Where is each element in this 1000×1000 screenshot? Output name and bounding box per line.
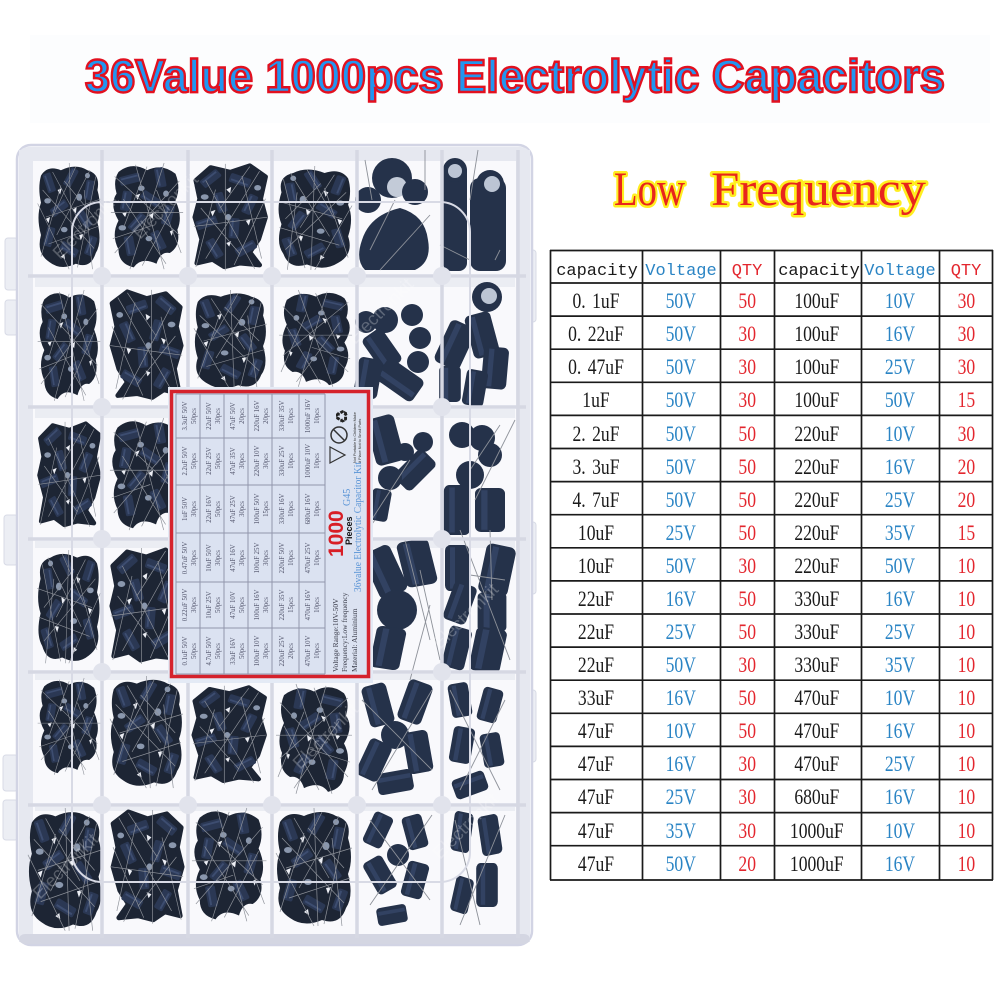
label value cells: 100uF 50V xyxy=(254,494,261,524)
row 18: 50V xyxy=(666,852,696,877)
row 13: 10 xyxy=(958,686,975,711)
label value cells: 47uF 35V xyxy=(230,447,237,475)
row 8: 15 xyxy=(958,521,975,546)
label value cells: 50pcs xyxy=(191,643,198,659)
row 13: 16V xyxy=(666,686,696,711)
label value cells: 33uF 16V xyxy=(230,637,237,665)
label value cells: 470uF 25V xyxy=(305,543,312,573)
divider junction nodes xyxy=(93,267,451,814)
label value cells: 30pcs xyxy=(215,550,222,566)
row 2 xyxy=(568,322,975,347)
row 15: 30 xyxy=(738,752,756,777)
label spec text: Material: Aluminium xyxy=(350,608,359,672)
organizer box panel xyxy=(3,145,536,945)
label value cells: 47uF 16V xyxy=(230,544,237,572)
row 12: 10 xyxy=(958,653,975,678)
row 6: 50V xyxy=(666,455,696,480)
subtitle: Low Frequency xyxy=(614,163,926,216)
row 8: 50 xyxy=(738,521,756,546)
row 13 xyxy=(578,686,975,711)
row 9 xyxy=(578,554,975,579)
row 3: 0. 47uF xyxy=(568,355,624,380)
label value cells: 47uF 25V xyxy=(230,495,237,523)
row 6: 220uF xyxy=(794,455,839,480)
row 1: 30 xyxy=(958,289,975,314)
label value cells: 50pcs xyxy=(239,643,246,659)
label spec text: Voltage Range:10V-50V xyxy=(331,598,340,672)
label value cells: 100uF 10V xyxy=(254,636,261,666)
label value cells: 30pcs xyxy=(191,501,198,517)
compartment dividers xyxy=(28,150,526,938)
label value cells: 0.47uF 50V xyxy=(182,542,189,574)
label value cells: 30pcs xyxy=(239,453,246,469)
row 4 xyxy=(582,388,975,413)
label value cells: 50pcs xyxy=(215,501,222,517)
row 7 xyxy=(573,488,975,513)
row 1: 0. 1uF xyxy=(573,289,619,314)
capacitors in small-value compartments xyxy=(28,163,352,931)
row 2: 100uF xyxy=(794,322,839,347)
row 6: 50 xyxy=(738,455,756,480)
icon: recycle: ♻ xyxy=(333,409,353,424)
row 11 xyxy=(578,620,975,645)
label value cells xyxy=(182,399,321,666)
row 7: 220uF xyxy=(794,488,839,513)
label value cells: 0.1uF 50V xyxy=(182,636,189,666)
label value cells: 10pcs xyxy=(288,501,295,517)
label warning small print: It Place Not to Small Parts xyxy=(358,419,362,463)
label value cells: 47uF 10V xyxy=(230,591,237,619)
row 16: 47uF xyxy=(578,785,614,810)
row 15: 25V xyxy=(885,752,916,777)
row 14: 16V xyxy=(885,719,916,744)
row 16: 16V xyxy=(885,785,916,810)
row 16: 25V xyxy=(666,785,696,810)
row 7: 4. 7uF xyxy=(573,488,619,513)
label value cells: 30pcs xyxy=(191,597,198,613)
row 1: 50V xyxy=(666,289,696,314)
row 7: 20 xyxy=(958,488,975,513)
row 8: 25V xyxy=(666,521,696,546)
row 8: 220uF xyxy=(794,521,839,546)
row 3: 100uF xyxy=(794,355,839,380)
label kit name: G45 xyxy=(342,489,353,506)
label 1000 pieces badge: Pieces xyxy=(344,516,354,545)
row 14: 10 xyxy=(958,719,975,744)
label value cells: 3.3uF 50V xyxy=(182,401,189,431)
label value cells: 50pcs xyxy=(191,453,198,469)
left and right latches xyxy=(3,238,536,840)
row 9: 10 xyxy=(958,554,975,579)
watermark text: Electronkit xyxy=(289,699,362,773)
subtitle: Low Frequency: Low xyxy=(614,163,685,216)
row 18: 10 xyxy=(958,852,975,877)
row 6: 20 xyxy=(958,455,975,480)
specification table xyxy=(550,250,993,880)
row 13: 50 xyxy=(738,686,756,711)
icon: warning triangle xyxy=(330,447,345,463)
watermark text: Electronkit xyxy=(129,169,202,243)
row 2: 0. 22uF xyxy=(568,322,624,347)
row 11: 330uF xyxy=(794,620,839,645)
data rows xyxy=(568,289,975,877)
row 17: 30 xyxy=(738,819,756,844)
row 18: 1000uF xyxy=(790,852,844,877)
title: 36Value 1000pcs Electrolytic Capacitors xyxy=(85,50,945,102)
row 2: 30 xyxy=(958,322,975,347)
row 12: 35V xyxy=(885,653,916,678)
label value cells: 15pcs xyxy=(263,501,270,517)
row 4: 30 xyxy=(738,388,756,413)
row 11: 25V xyxy=(885,620,916,645)
row 9: 220uF xyxy=(794,554,839,579)
row 5: 2. 2uF xyxy=(573,422,619,447)
row 17: 1000uF xyxy=(790,819,844,844)
label value cells: 50pcs xyxy=(215,643,222,659)
label value cells: 4.7uF 50V xyxy=(206,636,213,666)
product label card xyxy=(168,387,373,683)
label value cells: 470uF 10V xyxy=(305,636,312,666)
header row: Voltage xyxy=(864,262,936,281)
row 4: 50V xyxy=(885,388,916,413)
row 11: 10 xyxy=(958,620,975,645)
row 12: 30 xyxy=(738,653,756,678)
row 17: 35V xyxy=(666,819,696,844)
row 12: 50V xyxy=(666,653,696,678)
header row: capacity xyxy=(778,262,860,281)
row 5: 30 xyxy=(958,422,975,447)
label warning small print xyxy=(353,412,362,463)
row 7: 50 xyxy=(738,488,756,513)
label value cells: 30pcs xyxy=(239,501,246,517)
label value cells: 220uF 50V xyxy=(279,543,286,573)
label value cells: 220uF 16V xyxy=(254,401,261,431)
row 4: 15 xyxy=(958,388,975,413)
capacitors in large-value compartments xyxy=(353,158,517,926)
plastic tray xyxy=(17,145,532,945)
label value cells: 100uF 25V xyxy=(254,543,261,573)
row 11: 22uF xyxy=(578,620,614,645)
label value cells: 330uF 25V xyxy=(279,446,286,476)
label value cells: 220uF 35V xyxy=(279,590,286,620)
label value cells: 10pcs xyxy=(288,453,295,469)
label value cells: 10pcs xyxy=(314,597,321,613)
row 14 xyxy=(578,719,975,744)
header row: Voltage xyxy=(645,262,717,281)
header row: QTY xyxy=(732,262,762,281)
label value cells: 20pcs xyxy=(239,408,246,424)
label value cells: 100uF 16V xyxy=(254,590,261,620)
row 14: 10V xyxy=(666,719,696,744)
row 14: 50 xyxy=(738,719,756,744)
row 6 xyxy=(573,455,975,480)
label spec text xyxy=(331,592,359,672)
label value cells: 10pcs xyxy=(314,453,321,469)
label value cells: 30pcs xyxy=(263,453,270,469)
row 12 xyxy=(578,653,975,678)
row 1: 100uF xyxy=(794,289,839,314)
label value cells: 50pcs xyxy=(215,453,222,469)
row 9: 10uF xyxy=(578,554,614,579)
row 13: 470uF xyxy=(794,686,839,711)
label value cells: 10pcs xyxy=(314,550,321,566)
row 5: 220uF xyxy=(794,422,839,447)
row 15: 16V xyxy=(666,752,696,777)
row 10: 50 xyxy=(738,587,756,612)
row 3: 25V xyxy=(885,355,916,380)
row 7: 50V xyxy=(666,488,696,513)
row 5: 50V xyxy=(666,422,696,447)
label value cells: 330uF 35V xyxy=(279,401,286,431)
label kit name: 36value Electrolytic Capacitor Kit xyxy=(353,462,364,592)
label value cells: 50pcs xyxy=(239,597,246,613)
label value cells: 30pcs xyxy=(239,550,246,566)
row 18: 16V xyxy=(885,852,916,877)
header row xyxy=(556,262,981,281)
row 10: 16V xyxy=(885,587,916,612)
tray bottom edge shading xyxy=(19,934,530,944)
row 3: 30 xyxy=(958,355,975,380)
label value cells: 220uF 25V xyxy=(279,636,286,666)
row 15: 10 xyxy=(958,752,975,777)
label value cells: 680uF 16V xyxy=(305,494,312,524)
label spec text: Frequency:Low frequency xyxy=(340,592,349,672)
watermark text: Electronkit xyxy=(29,829,102,903)
row 18: 20 xyxy=(738,852,756,877)
label value cells: 10pcs xyxy=(314,408,321,424)
label value cells: 10pcs xyxy=(288,550,295,566)
row 11: 25V xyxy=(666,620,696,645)
label value cells: 470uF 16V xyxy=(305,590,312,620)
row 8: 35V xyxy=(885,521,916,546)
row 14: 47uF xyxy=(578,719,614,744)
label value cells: 30pcs xyxy=(215,408,222,424)
watermark text: Electronkit xyxy=(429,579,502,653)
header row: QTY xyxy=(951,262,981,281)
row 13: 33uF xyxy=(578,686,614,711)
label value cells: 330uF 16V xyxy=(279,494,286,524)
watermark text: Electronkit xyxy=(429,789,502,863)
row 5: 10V xyxy=(885,422,916,447)
label value cells: 22uF 16V xyxy=(206,495,213,523)
row 6: 3. 3uF xyxy=(573,455,619,480)
label background and red border xyxy=(168,387,373,683)
row 3: 50V xyxy=(666,355,696,380)
label value cells: 2.2uF 50V xyxy=(182,446,189,476)
label value cells: 30pcs xyxy=(191,550,198,566)
row 13: 10V xyxy=(885,686,916,711)
row 10: 16V xyxy=(666,587,696,612)
label grid xyxy=(176,394,325,674)
row 9: 30 xyxy=(738,554,756,579)
row 17 xyxy=(578,819,975,844)
label value cells: 10pcs xyxy=(314,643,321,659)
row 18: 47uF xyxy=(578,852,614,877)
tray inner shading xyxy=(19,147,530,942)
row 3 xyxy=(568,355,975,380)
label value cells: 30pcs xyxy=(263,597,270,613)
label warning small print: Not Portable to Children Make xyxy=(353,412,357,463)
label value cells: 47uF 50V xyxy=(230,402,237,430)
row 10 xyxy=(578,587,975,612)
watermark text: Electronkit xyxy=(344,274,417,348)
header row: capacity xyxy=(556,262,638,281)
row 2: 30 xyxy=(738,322,756,347)
label value cells: 20pcs xyxy=(263,408,270,424)
row 16 xyxy=(578,785,975,810)
label value cells: 20pcs xyxy=(288,643,295,659)
label value cells: 10uF 25V xyxy=(206,591,213,619)
row 1: 10V xyxy=(885,289,916,314)
label value cells: 220uF 10V xyxy=(254,446,261,476)
row 16: 680uF xyxy=(794,785,839,810)
label value cells: 30pcs xyxy=(263,643,270,659)
row 7: 25V xyxy=(885,488,916,513)
label value cells: 15pcs xyxy=(288,597,295,613)
table grid xyxy=(550,250,993,880)
row 10: 330uF xyxy=(794,587,839,612)
label value cells: 0.22uF 50V xyxy=(182,589,189,621)
row 4: 50V xyxy=(666,388,696,413)
row 8: 10uF xyxy=(578,521,614,546)
row 12: 22uF xyxy=(578,653,614,678)
subtitle: Low Frequency: Frequency xyxy=(711,163,926,216)
label 1000 pieces badge: 1000 xyxy=(325,510,348,557)
watermark text xyxy=(29,169,502,903)
label value cells: 10pcs xyxy=(314,501,321,517)
row 16: 10 xyxy=(958,785,975,810)
row 5 xyxy=(573,422,975,447)
row 4: 1uF xyxy=(582,388,610,413)
row 2: 50V xyxy=(666,322,696,347)
row 11: 50 xyxy=(738,620,756,645)
row 5: 50 xyxy=(738,422,756,447)
label value cells: 10uF 50V xyxy=(206,544,213,572)
label kit name xyxy=(342,462,364,592)
row 17: 10 xyxy=(958,819,975,844)
label value cells: 10pcs xyxy=(288,408,295,424)
row 10: 10 xyxy=(958,587,975,612)
row 10: 22uF xyxy=(578,587,614,612)
row 12: 330uF xyxy=(794,653,839,678)
row 17: 10V xyxy=(885,819,916,844)
row 18 xyxy=(578,852,975,877)
label value cells: 22uF 50V xyxy=(206,402,213,430)
row 15 xyxy=(578,752,975,777)
row 17: 47uF xyxy=(578,819,614,844)
row 9: 50V xyxy=(885,554,916,579)
row 14: 470uF xyxy=(794,719,839,744)
row 8 xyxy=(578,521,975,546)
label value cells: 22uF 25V xyxy=(206,447,213,475)
row 16: 30 xyxy=(738,785,756,810)
row 1: 50 xyxy=(738,289,756,314)
label value cells: 1000uF 16V xyxy=(305,399,312,433)
row 1 xyxy=(573,289,975,314)
capacitor leads xyxy=(360,150,515,925)
row 15: 470uF xyxy=(794,752,839,777)
title background band xyxy=(30,35,990,123)
row 6: 16V xyxy=(885,455,916,480)
label value cells: 1000uF 10V xyxy=(305,444,312,478)
label value cells: 1uF 50V xyxy=(182,497,189,521)
watermark text: Electronkit xyxy=(49,189,122,263)
row 15: 47uF xyxy=(578,752,614,777)
label value cells: 30pcs xyxy=(263,550,270,566)
label value cells: 50pcs xyxy=(191,408,198,424)
row 9: 50V xyxy=(666,554,696,579)
row 2: 16V xyxy=(885,322,916,347)
icon: no small parts circle xyxy=(331,427,347,443)
label value cells: 50pcs xyxy=(215,597,222,613)
row 4: 100uF xyxy=(794,388,839,413)
row 3: 30 xyxy=(738,355,756,380)
